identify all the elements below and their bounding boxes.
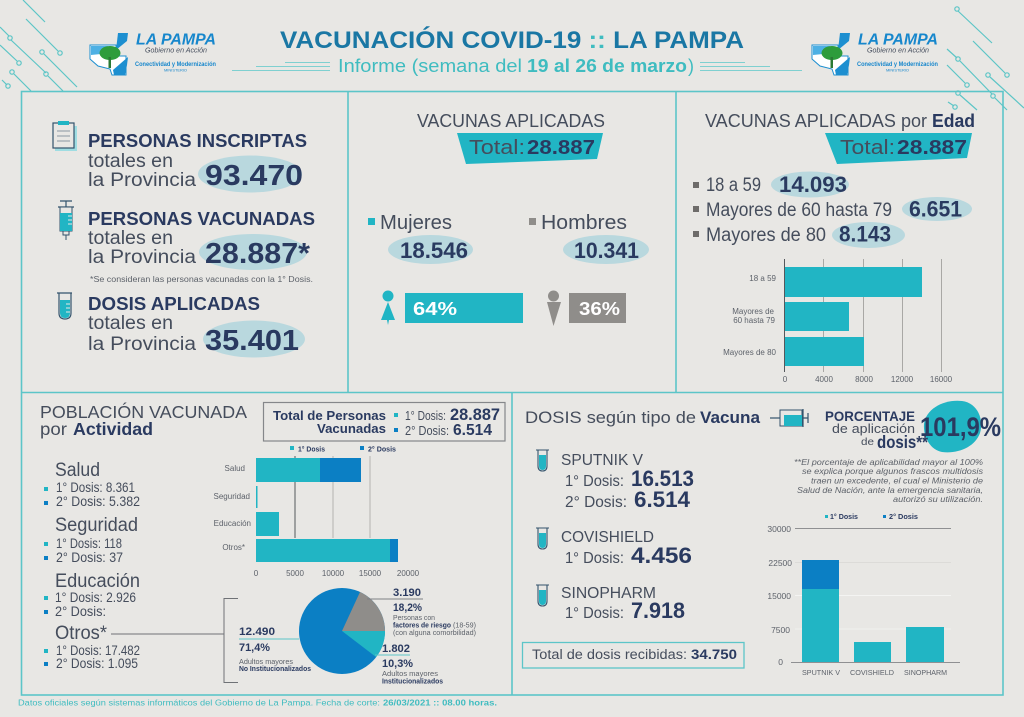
total banner: 28.887 <box>897 137 967 159</box>
panel: dosis segun vacuna <box>522 401 1001 677</box>
title: VACUNACIÓN COVID-19 :: LA PAMPA <box>280 26 744 54</box>
pie label: no institucionalizados: 71,4% <box>239 642 270 654</box>
stat: personas vacunadas <box>88 209 315 284</box>
stat: sputnik v: 1° Dosis: <box>565 473 624 490</box>
bar chart: vacunas: 22500 <box>768 558 792 568</box>
logo: La Pampa right: Gobierno en Acción <box>867 46 929 54</box>
footnote <box>794 458 984 504</box>
stat: sputnik v: 6.514 <box>634 487 691 512</box>
footnote: autorizó su utilización. <box>893 495 983 504</box>
bar chart: actividad: Seguridad <box>214 492 250 501</box>
pie label: factores de riesgo: (18-59) <box>453 622 476 630</box>
total banner <box>457 133 603 164</box>
stat: sinopharm: 7.918 <box>631 598 685 623</box>
stat: 60 a 79 <box>693 196 972 222</box>
subtitle: 19 al 26 de marzo <box>527 56 687 76</box>
stat: dosis aplicadas: la Provincia <box>88 334 196 355</box>
icon: tube sputnik <box>536 450 549 471</box>
heading: Actividad <box>73 419 153 439</box>
stat: 60 a 79: Mayores de 60 hasta 79 <box>706 200 892 221</box>
total box: 34.750 <box>691 647 737 662</box>
stat: mayores de 80 <box>693 222 905 248</box>
panel: totals <box>53 121 315 358</box>
logo: La Pampa right: LA PAMPA <box>858 32 938 48</box>
icon: test tube <box>57 293 72 319</box>
logo: La Pampa left: MINISTERIO <box>164 68 187 72</box>
bar chart: edad: 4000 <box>815 375 833 384</box>
heading: DOSIS según tipo de <box>525 408 696 427</box>
footer source note <box>18 698 497 708</box>
pie label: institucionalizados <box>375 643 443 686</box>
stat: dosis aplicadas <box>88 294 305 358</box>
stat: mujeres: 18.546 <box>400 238 468 263</box>
bar chart: vacunas: 15000 <box>767 591 791 601</box>
stat: 18 a 59: 14.093 <box>779 172 847 197</box>
list: salud: 1° Dosis: 8.361 <box>56 480 135 495</box>
bar chart: edad: 18 a 59 <box>749 274 777 283</box>
list: seguridad: Seguridad <box>55 515 138 536</box>
list: otros <box>44 623 140 671</box>
list: otros: 2° Dosis: 1.095 <box>56 656 138 671</box>
bar chart: actividad <box>214 444 420 578</box>
stat: mayores de 80: 8.143 <box>839 222 891 246</box>
stat: personas vacunadas: 28.887* <box>205 238 311 270</box>
total box: Vacunadas <box>317 421 386 436</box>
porcentaje callout: dosis** <box>877 432 928 452</box>
bar chart: actividad: 10000 <box>322 569 345 578</box>
pie label: no institucionalizados: Adultos mayores <box>239 659 294 666</box>
bar chart: actividad: 5000 <box>286 569 304 578</box>
bar chart: vacunas: 30000 <box>767 524 791 534</box>
list: otros: Otros* <box>55 623 108 644</box>
stat: personas vacunadas: totales en <box>88 228 173 249</box>
total box: Total de Personas <box>273 408 386 423</box>
stat: sinopharm <box>561 585 685 623</box>
subtitle: Informe (semana del <box>338 56 522 76</box>
icon: tube covishield <box>536 528 549 549</box>
total banner: 28.887 <box>527 137 595 159</box>
porcentaje callout: 101,9% <box>920 412 1001 442</box>
stat: 18 a 59: 18 a 59 <box>706 175 761 196</box>
footer source note: Datos oficiales según sistemas informáticos del Gobierno de La Pampa. Fecha de corte: <box>18 698 380 708</box>
stat: hombres <box>529 211 649 264</box>
stat: personas vacunadas: la Provincia <box>88 247 196 268</box>
pie label: institucionalizados: 1.802 <box>382 643 410 655</box>
icon: clipboard <box>53 121 77 151</box>
stat: personas inscriptas: PERSONAS INSCRIPTAS <box>88 131 307 151</box>
icon: woman <box>381 290 395 325</box>
stat: sputnik v <box>561 452 694 512</box>
bar chart: edad: 16000 <box>930 375 953 384</box>
bar chart: edad: 8000 <box>855 375 873 384</box>
stat: personas inscriptas: la Provincia <box>88 170 196 191</box>
bar chart: actividad: 0 <box>254 569 259 578</box>
bar chart: edad: 12000 <box>891 375 914 384</box>
bar chart: edad: Mayores de 80 <box>723 348 777 357</box>
subtitle <box>232 56 802 76</box>
stat: personas inscriptas <box>88 131 307 192</box>
heading: por <box>40 419 67 439</box>
stat: hombres: 10.341 <box>574 238 639 263</box>
icon: horizontal syringe <box>770 409 808 427</box>
pie label: no institucionalizados: 12.490 <box>239 626 275 638</box>
porcentaje callout <box>825 401 1001 452</box>
icon: tube sinopharm <box>536 585 549 606</box>
pie label: institucionalizados: Institucionalizados <box>382 678 443 686</box>
stat: sputnik v: SPUTNIK V <box>561 452 643 469</box>
pie label: no institucionalizados <box>239 626 311 673</box>
stat: covishield: COVISHIELD <box>561 529 654 546</box>
list: educacion: Educación <box>55 571 140 592</box>
heading <box>40 401 247 439</box>
stat: covishield: 1° Dosis: <box>565 550 624 567</box>
logo: La Pampa right <box>812 32 938 75</box>
stat: dosis aplicadas: totales en <box>88 313 173 334</box>
bar chart: edad: 60 hasta 79 <box>733 316 776 325</box>
panel: vacunas por edad <box>693 110 975 384</box>
pie label: factores de riesgo: factores de riesgo <box>393 622 451 630</box>
list: otros: 1° Dosis: 17.482 <box>56 643 140 658</box>
bar chart: edad: 0 <box>783 375 788 384</box>
pie label: factores de riesgo: (con alguna comorbilidad) <box>393 630 476 637</box>
total box <box>522 642 744 668</box>
list: salud: 2° Dosis: 5.382 <box>56 494 140 509</box>
stat: sinopharm: 1° Dosis: <box>565 605 624 622</box>
total banner: Total: <box>840 137 895 159</box>
bar chart: actividad: 20000 <box>397 569 420 578</box>
total box: 28.887 <box>450 405 500 424</box>
stat: mujeres: Mujeres <box>380 211 452 234</box>
bar: 36% <box>569 293 626 323</box>
total banner: Total: <box>469 137 525 159</box>
pie label: factores de riesgo <box>367 587 476 637</box>
panel: poblacion vacunada por actividad <box>40 401 505 686</box>
stat: mujeres <box>368 211 473 264</box>
total box: 1° Dosis: <box>405 409 446 423</box>
stat: 60 a 79: 6.651 <box>909 196 962 222</box>
bar chart: vacunas: COVISHIELD <box>850 670 894 677</box>
bar chart: actividad: Otros* <box>222 543 245 552</box>
stat: dosis aplicadas: DOSIS APLICADAS <box>88 294 260 314</box>
bar: 64%: 64% <box>413 298 457 319</box>
stat: covishield: 4.456 <box>631 543 692 568</box>
list: educacion <box>44 571 140 619</box>
heading: Vacuna <box>700 408 761 427</box>
pie label: factores de riesgo: 3.190 <box>393 587 421 599</box>
footnote: **El porcentaje de aplicabilidad mayor al 100% <box>794 458 983 467</box>
footnote: traen un excedente, el cual el Ministerio de <box>811 476 984 486</box>
list: seguridad: 2° Dosis: 37 <box>56 550 123 565</box>
list: salud <box>44 460 140 509</box>
bar chart: vacunas: SINOPHARM <box>904 670 947 677</box>
subtitle: ) <box>688 56 694 76</box>
heading <box>525 408 761 427</box>
total box: 6.514 <box>453 422 492 439</box>
logo: La Pampa right: MINISTERIO <box>886 68 909 72</box>
bar chart: vacunas: 0 <box>778 657 783 667</box>
bar chart: actividad: 15000 <box>359 569 382 578</box>
stat: personas inscriptas: 93.470 <box>205 160 303 192</box>
panel: vacunas aplicadas <box>368 110 649 326</box>
pie label: factores de riesgo: 18,2% <box>393 602 422 614</box>
bar chart: actividad: 2° Dosis <box>368 444 396 454</box>
stat: personas vacunadas: PERSONAS VACUNADAS <box>88 209 315 229</box>
footer source note: 26/03/2021 :: 08.00 horas. <box>383 698 497 708</box>
porcentaje callout: de <box>861 437 875 448</box>
total box <box>264 402 505 441</box>
icon: man <box>547 290 561 326</box>
bar chart: edad <box>723 259 953 384</box>
stat: personas inscriptas: totales en <box>88 151 173 172</box>
porcentaje callout: PORCENTAJE <box>825 408 915 424</box>
logo: La Pampa left: LA PAMPA <box>136 32 216 48</box>
pie label: institucionalizados: Adultos mayores <box>382 671 439 678</box>
list: educacion: 1° Dosis: 2.926 <box>55 590 136 605</box>
bar chart: actividad: Salud <box>225 464 245 473</box>
bar chart: edad: Mayores de <box>732 307 775 316</box>
logo: La Pampa left: Conectividad y Modernización <box>135 61 216 68</box>
heading: VACUNAS APLICADAS <box>417 110 605 131</box>
stat: sinopharm: SINOPHARM <box>561 585 656 602</box>
stat: sputnik v: 2° Dosis: <box>565 494 627 511</box>
total box: 2° Dosis: <box>405 424 449 438</box>
footnote: Salud de Nación, ante la emergencia sanitaria, <box>797 486 983 495</box>
bar chart: vacunas: 7500 <box>771 625 790 635</box>
pie label: factores de riesgo: Personas con <box>393 615 435 622</box>
stat: mayores de 80: Mayores de 80 <box>706 225 826 246</box>
stat: 18 a 59 <box>693 172 849 198</box>
list: salud: Salud <box>55 460 100 481</box>
pie label: no institucionalizados: No Institucionalizados <box>239 666 311 673</box>
bar chart: actividad: Educación <box>214 519 251 528</box>
bar chart: vacunas: SPUTNIK V <box>802 670 840 677</box>
footnote: se explica porque algunos frascos multidosis <box>802 467 983 476</box>
stat: hombres: Hombres <box>541 211 627 234</box>
stat: personas vacunadas: *Se consideran las personas vacunadas con la 1° Dosis. <box>90 275 313 284</box>
list: seguridad: 1° Dosis: 118 <box>56 536 122 551</box>
list: educacion: 2° Dosis: <box>55 604 106 619</box>
list: seguridad <box>44 515 138 565</box>
logo: La Pampa left: Gobierno en Acción <box>145 46 207 54</box>
bar: 64% <box>405 293 523 323</box>
stat: sputnik v: 16.513 <box>631 466 694 491</box>
bar chart: vacunas: 2° Dosis <box>889 512 918 521</box>
total box: Total de dosis recibidas: <box>532 647 687 662</box>
porcentaje callout: de aplicación <box>832 421 915 436</box>
bracket connector <box>111 598 238 682</box>
bar chart: vacunas <box>767 512 960 677</box>
heading: POBLACIÓN VACUNADA <box>40 401 247 422</box>
total banner <box>825 133 972 164</box>
logo: La Pampa left <box>90 32 216 75</box>
bar chart: actividad: 1° Dosis <box>298 444 325 454</box>
pie chart: otros <box>299 588 385 674</box>
bar: 36%: 36% <box>579 298 620 319</box>
bar chart: vacunas: 1° Dosis <box>830 512 858 521</box>
pie label: institucionalizados: 10,3% <box>382 658 413 670</box>
stat: covishield <box>561 529 692 568</box>
logo: La Pampa right: Conectividad y Modernización <box>857 61 938 68</box>
icon: syringe <box>58 201 74 240</box>
stat: dosis aplicadas: 35.401 <box>205 325 299 357</box>
heading: Edad <box>932 110 975 131</box>
heading: VACUNAS APLICADAS por <box>705 110 927 131</box>
